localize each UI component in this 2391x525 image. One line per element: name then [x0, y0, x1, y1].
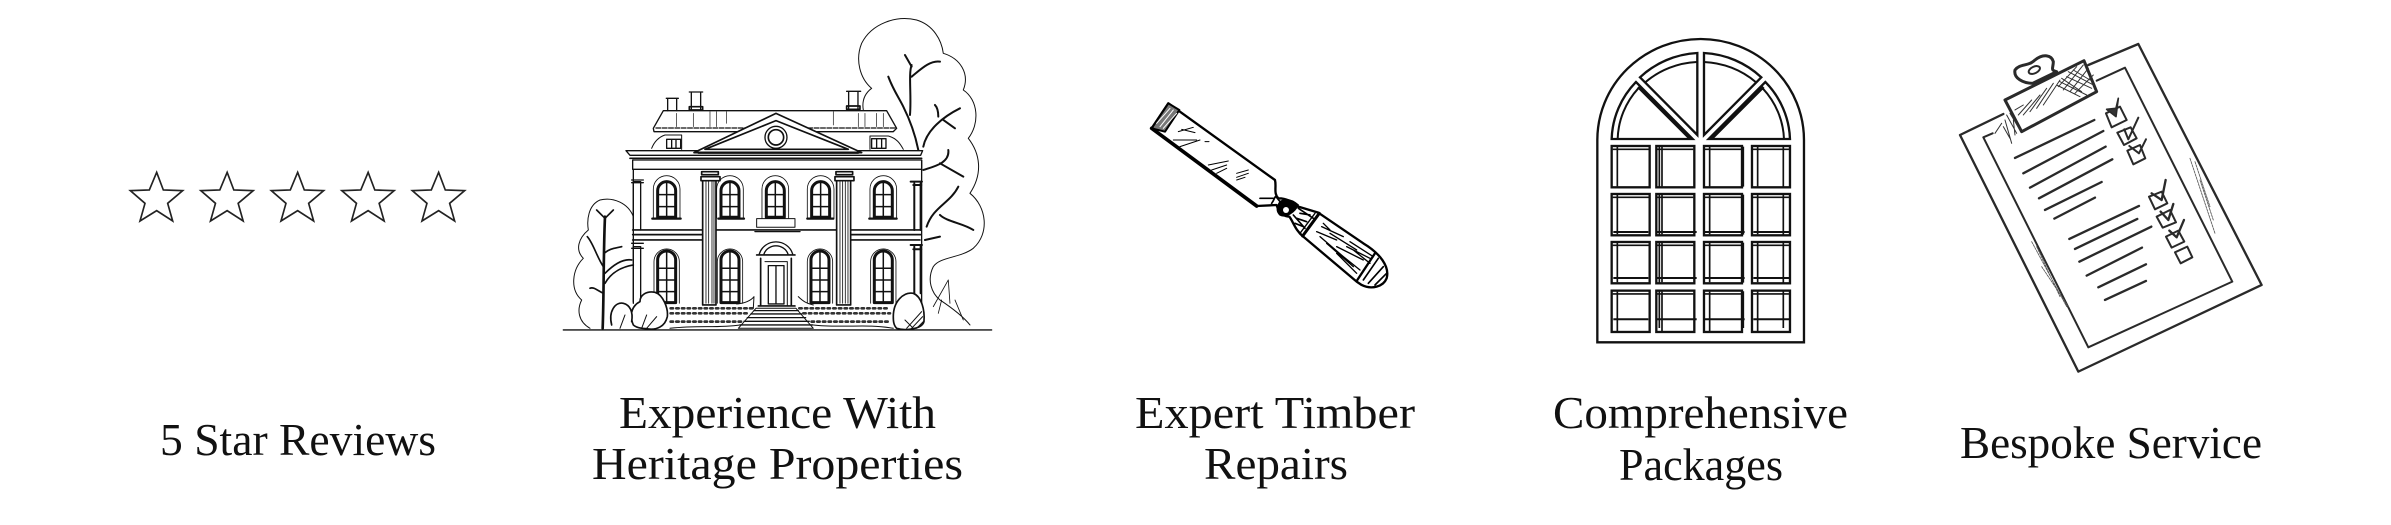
label: Experience With Heritage Properties: Heritage Properties	[592, 438, 963, 489]
icon: arched window	[1597, 39, 1804, 342]
label: Comprehensive Packages: Packages	[1619, 439, 1783, 490]
label: Expert Timber Repairs	[1135, 387, 1415, 489]
label: Expert Timber Repairs: Expert Timber	[1135, 387, 1415, 438]
label: Expert Timber Repairs: Repairs	[1204, 438, 1348, 489]
panel: bespoke service	[1960, 44, 2262, 468]
icon: five stars	[130, 172, 465, 221]
icon: wood chisel	[1152, 103, 1387, 287]
label: Experience With Heritage Properties: Experience With	[619, 387, 936, 438]
label: 5 Star Reviews: 5 Star Reviews	[160, 414, 436, 465]
label: Comprehensive Packages	[1553, 387, 1848, 490]
panel: expert timber repairs	[1135, 103, 1415, 489]
panel: 5 star reviews	[130, 172, 465, 465]
label: Experience With Heritage Properties	[592, 387, 963, 489]
icon: clipboard checklist	[1960, 44, 2262, 372]
label: Comprehensive Packages: Comprehensive	[1553, 387, 1848, 438]
panel: comprehensive packages	[1553, 39, 1848, 490]
icon: heritage house with trees	[563, 19, 992, 330]
panel: heritage properties	[563, 19, 992, 489]
label: Bespoke Service: Bespoke Service	[1960, 417, 2262, 468]
